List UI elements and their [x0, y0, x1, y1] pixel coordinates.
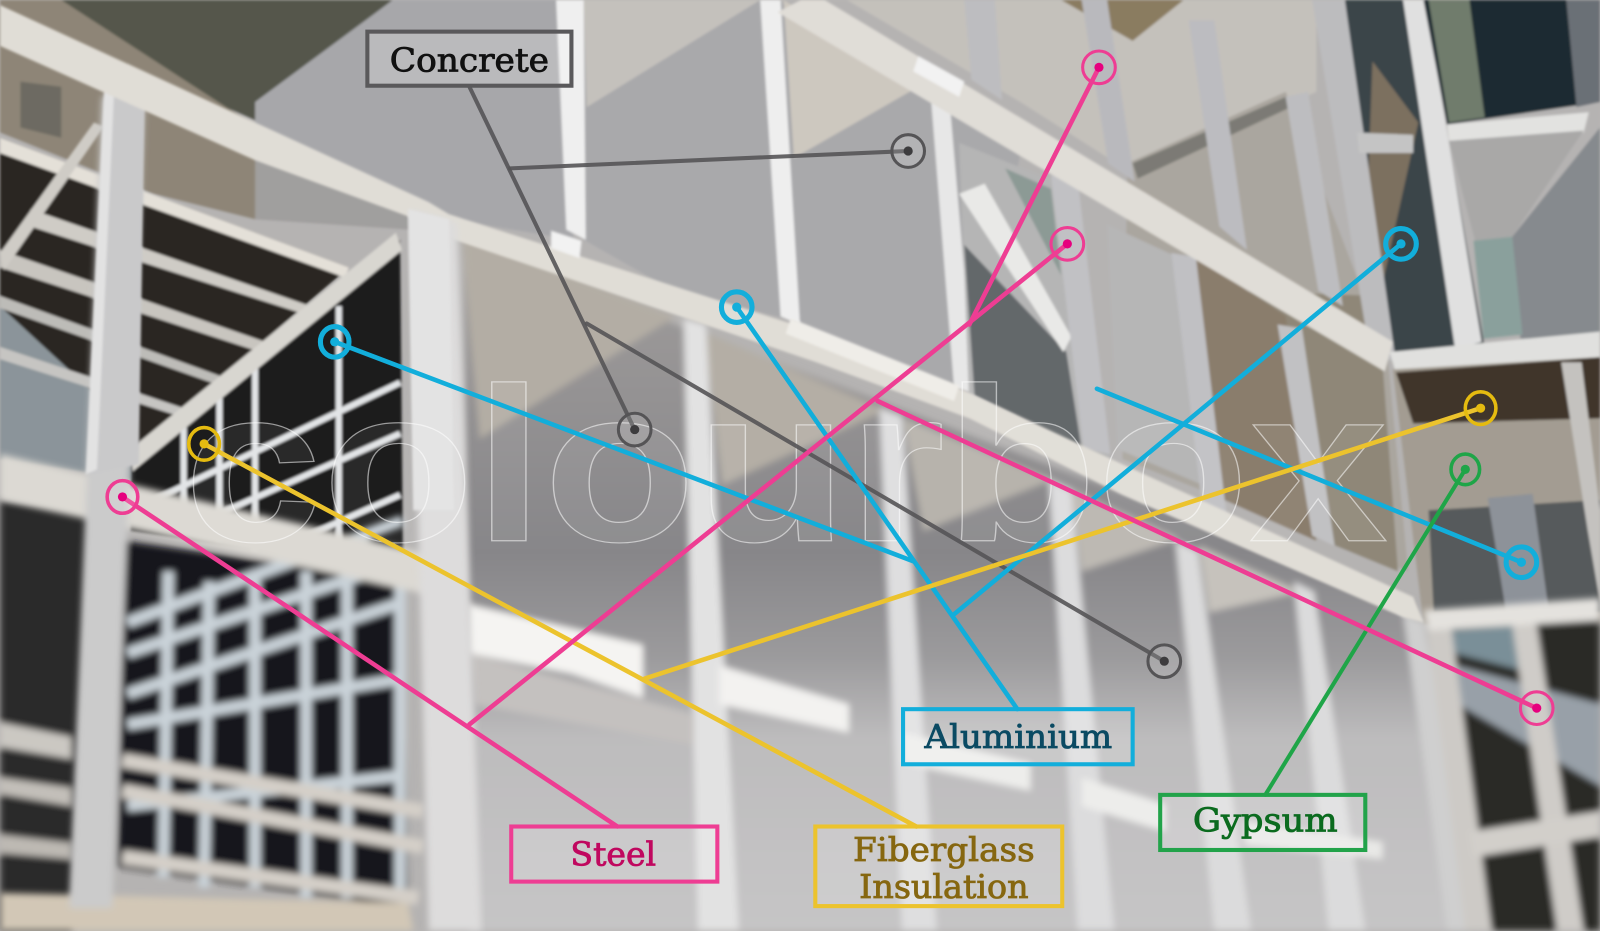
- lower panels: [464, 245, 1480, 931]
- marker: concrete on upper panel: [892, 135, 924, 167]
- marker: aluminium left: [320, 327, 349, 357]
- marker: concrete on lower panel: [1148, 645, 1181, 678]
- upper beam: [778, 0, 1393, 371]
- label: Concrete: Concrete: [390, 41, 549, 79]
- marker: steel lower right: [1520, 692, 1553, 724]
- white pillars upper: [556, 0, 586, 240]
- concrete upper panels: [255, 0, 573, 240]
- label: Fiberglass Insulation: Insulation: [859, 868, 1029, 906]
- callout: gypsum: [1160, 454, 1480, 850]
- columns: [964, 0, 1002, 100]
- watermark: colourbox outline: colourbox: [184, 343, 1388, 588]
- marker: aluminium centre: [721, 292, 752, 322]
- right shaft: [1316, 0, 1485, 357]
- callout: aluminium: [320, 229, 1537, 764]
- lower right: [1429, 612, 1600, 931]
- label: Gypsum: [1160, 795, 1365, 850]
- left dark ceiling: [0, 138, 349, 454]
- marker: fiberglass right: [1465, 392, 1496, 424]
- label: Steel: [511, 827, 717, 882]
- connector lines: fiberglass: [204, 408, 1481, 827]
- label: Fiberglass Insulation: Fiberglass: [853, 831, 1035, 869]
- left window grid: [131, 240, 403, 571]
- connector lines: steel: [122, 67, 1537, 827]
- left lower exterior: [0, 500, 92, 931]
- marker: aluminium upper right: [1386, 229, 1416, 259]
- marker: steel upper: [1083, 51, 1115, 84]
- connector line: gypsum: [1265, 469, 1465, 795]
- label: Steel: Steel: [570, 835, 656, 873]
- connector lines: concrete: [469, 87, 1164, 661]
- upper ceiling behind: [847, 0, 1316, 173]
- label: Aluminium: Aluminium: [923, 718, 1112, 756]
- top left soffit: [51, 0, 393, 143]
- connector lines: aluminium: [335, 244, 1521, 709]
- marker: gypsum: [1451, 454, 1480, 485]
- top right room: [1423, 0, 1600, 124]
- label: Fiberglass Insulation: [815, 827, 1062, 906]
- white ledges: [467, 604, 643, 698]
- label: Gypsum: Gypsum: [1193, 802, 1338, 840]
- marker: steel left: [107, 481, 138, 513]
- white lower pillars: [684, 318, 739, 931]
- label: Aluminium: [903, 709, 1133, 764]
- marker: steel middle: [1051, 228, 1084, 260]
- marker: aluminium lower right: [1506, 547, 1537, 578]
- main beams: [0, 5, 1423, 622]
- callout: concrete: [367, 32, 1181, 678]
- marker: concrete on panel: [618, 413, 651, 446]
- stair zone: [959, 143, 1112, 469]
- callout: fiberglass insulation: [189, 392, 1496, 906]
- marker: fiberglass left: [189, 428, 219, 460]
- label: Concrete: [367, 32, 571, 86]
- right middle: [1393, 357, 1600, 624]
